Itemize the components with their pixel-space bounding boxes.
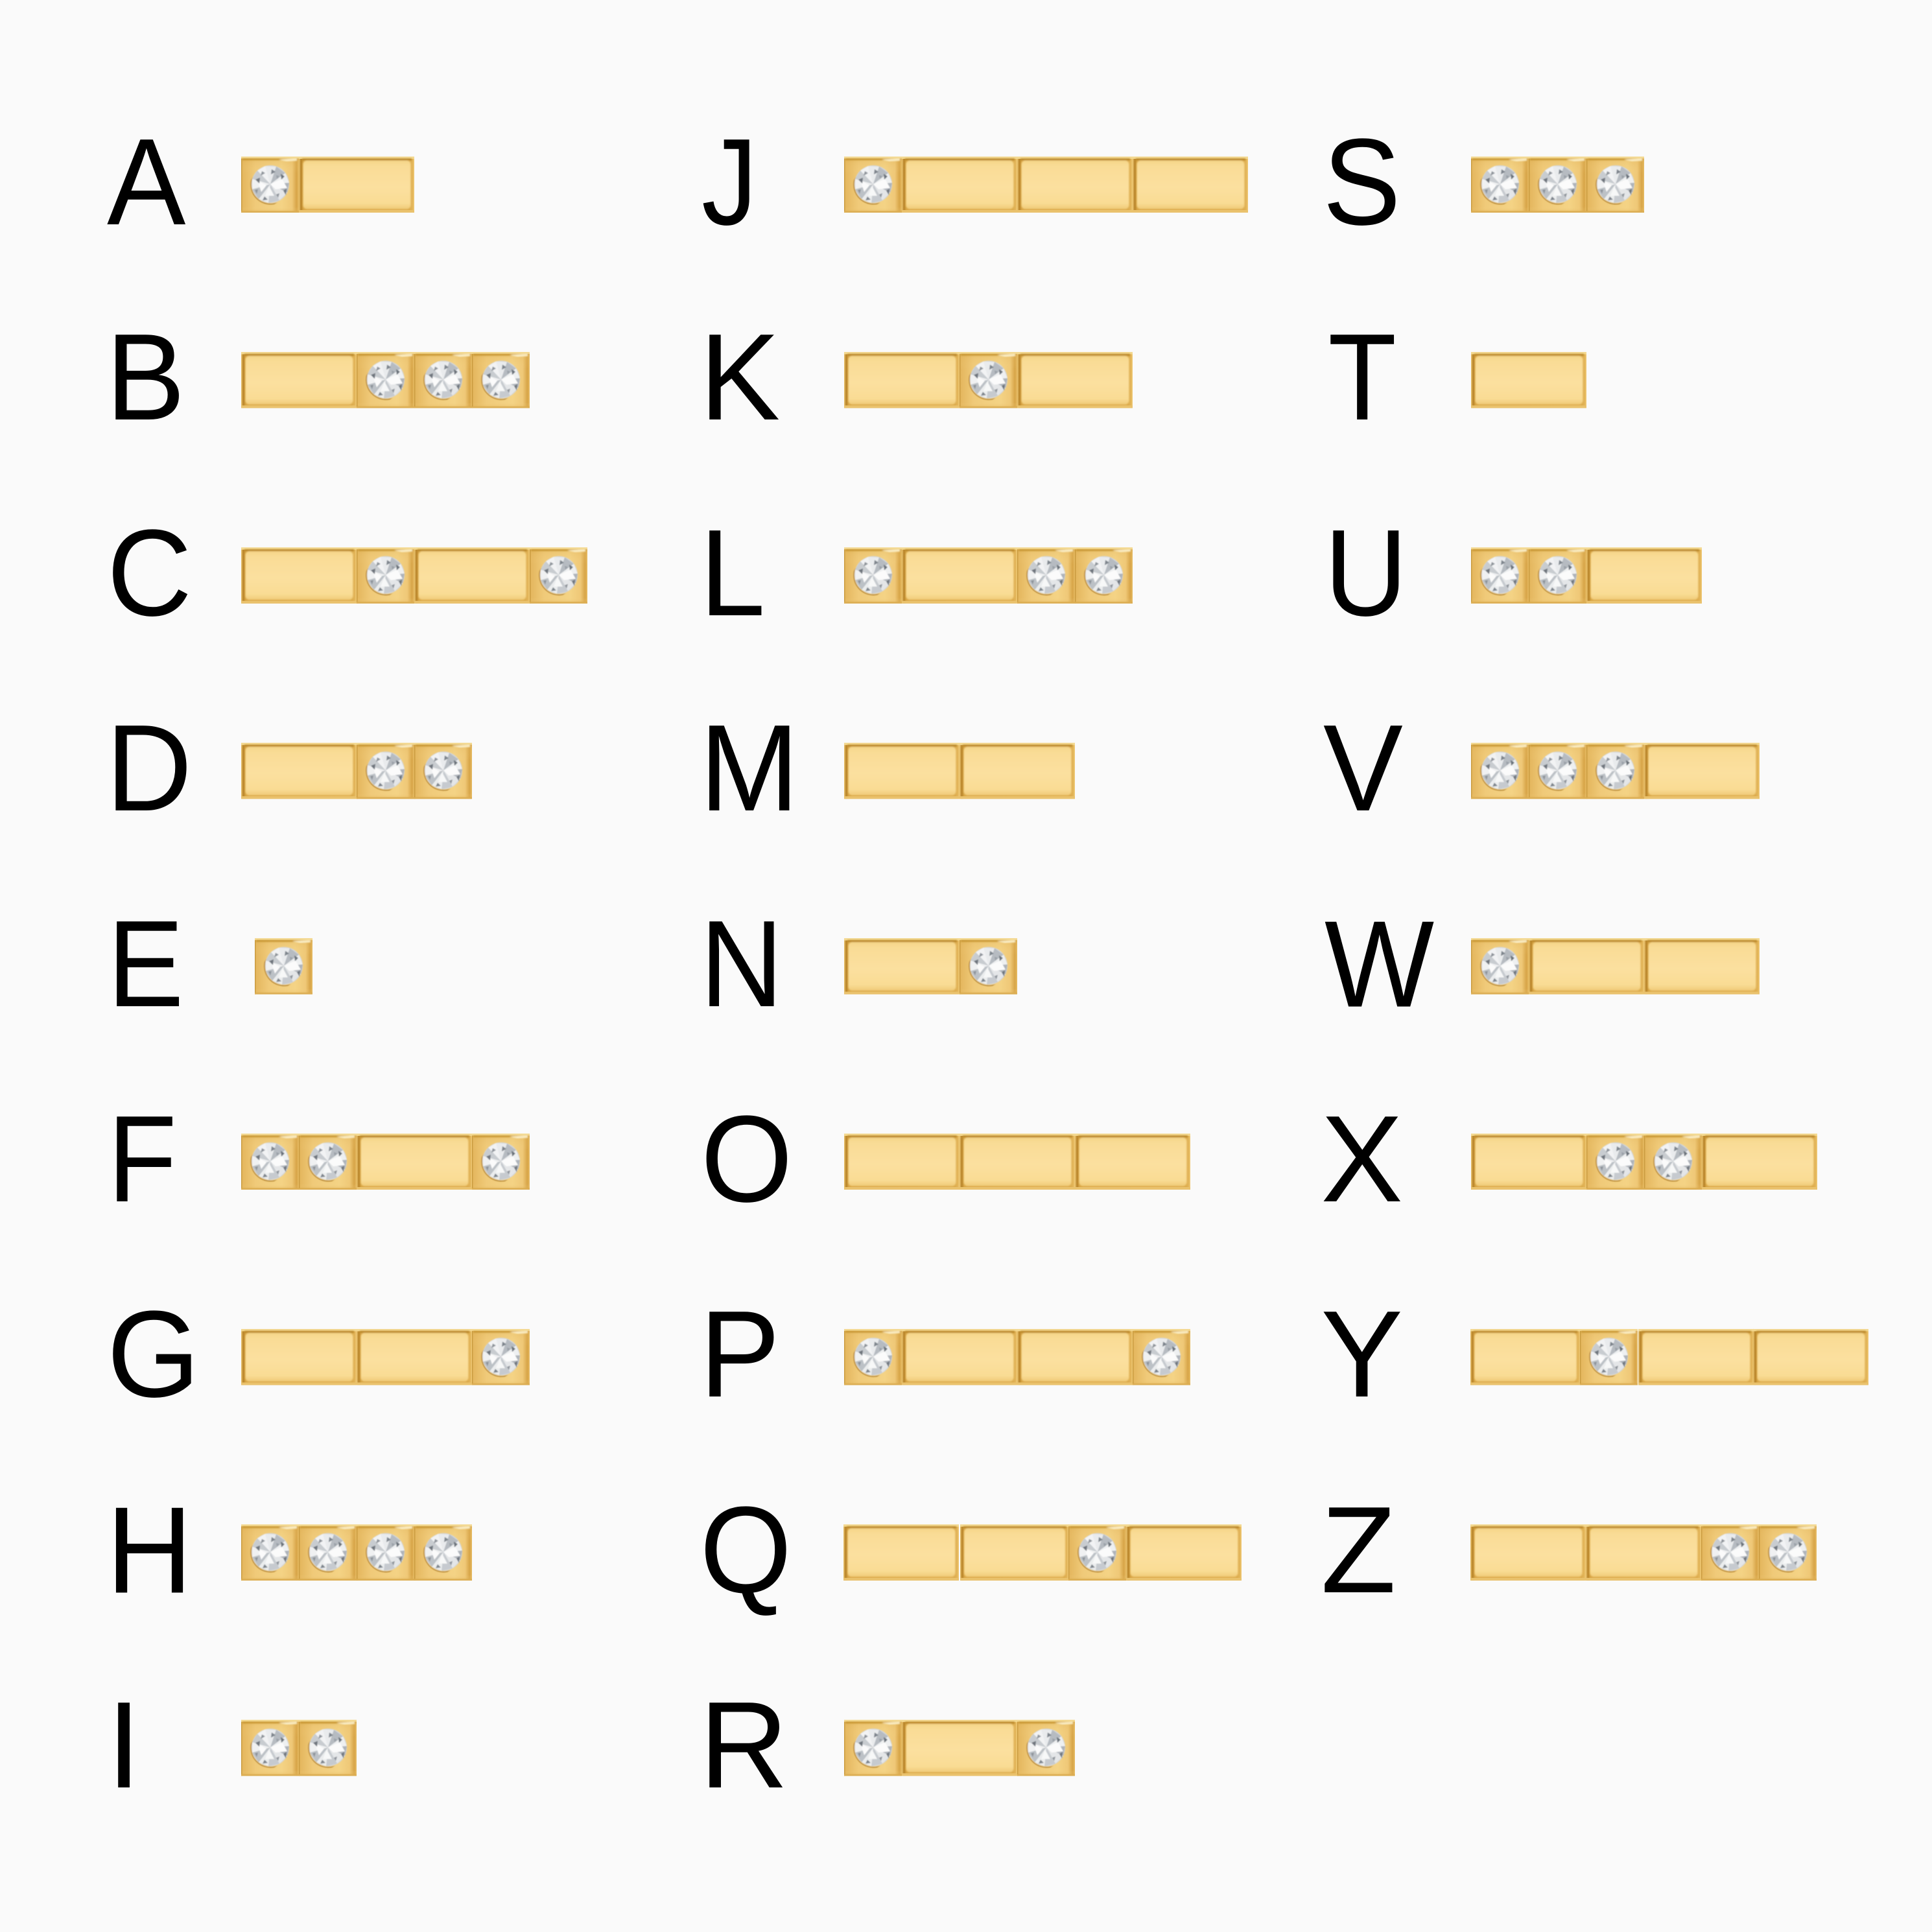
row: letter F xyxy=(108,1090,530,1228)
letter K: K xyxy=(700,308,780,445)
code for F xyxy=(241,1133,530,1190)
letter U: U xyxy=(1325,504,1408,641)
code for X xyxy=(1471,1133,1817,1190)
code for C xyxy=(241,547,587,604)
code for M xyxy=(844,743,1075,799)
code for S xyxy=(1471,157,1644,213)
code for K xyxy=(844,352,1133,408)
code for J xyxy=(844,157,1248,213)
row: letter T xyxy=(1328,309,1586,446)
row: letter J xyxy=(701,114,1248,251)
row: letter O xyxy=(701,1090,1190,1228)
letter L: L xyxy=(700,504,765,642)
row: letter A xyxy=(107,113,414,251)
letter Y: Y xyxy=(1321,1286,1403,1423)
code for I xyxy=(241,1720,357,1776)
code for P xyxy=(844,1329,1190,1385)
letter F: F xyxy=(108,1090,177,1228)
letter W: W xyxy=(1325,896,1434,1033)
letter D: D xyxy=(106,699,192,837)
row: letter C xyxy=(107,504,587,642)
letter P: P xyxy=(700,1285,780,1422)
row: letter N xyxy=(700,895,1017,1032)
code for B xyxy=(241,352,530,408)
code for L xyxy=(844,547,1133,604)
row: letter I xyxy=(107,1677,357,1814)
code for U xyxy=(1471,547,1702,604)
letter S: S xyxy=(1323,113,1401,251)
letter V: V xyxy=(1323,699,1403,837)
row: letter R xyxy=(700,1677,1075,1814)
row: letter D xyxy=(106,699,472,837)
row: letter L xyxy=(700,504,1133,642)
letter M: M xyxy=(700,699,799,837)
letter C: C xyxy=(107,504,192,642)
row: letter W xyxy=(1325,896,1760,1033)
row: letter V xyxy=(1323,699,1760,837)
row: letter K xyxy=(700,308,1133,445)
code for W xyxy=(1471,938,1760,995)
code for Q xyxy=(843,1524,1242,1581)
code for T xyxy=(1471,352,1586,408)
code for D xyxy=(241,743,472,799)
letter G: G xyxy=(107,1285,200,1423)
letter Q: Q xyxy=(700,1481,792,1619)
letter Z: Z xyxy=(1321,1481,1396,1619)
code for Y xyxy=(1470,1329,1868,1385)
letter T: T xyxy=(1328,309,1396,446)
row: letter Y xyxy=(1321,1286,1868,1423)
letter R: R xyxy=(700,1677,788,1814)
code for Z xyxy=(1470,1524,1817,1581)
row: letter Q xyxy=(700,1481,1242,1619)
code for A xyxy=(241,157,414,213)
row: letter G xyxy=(107,1285,530,1423)
letter I: I xyxy=(107,1677,141,1814)
row: letter S xyxy=(1323,113,1644,251)
code for H xyxy=(241,1524,472,1581)
row: letter H xyxy=(106,1481,472,1619)
row: letter U xyxy=(1325,504,1702,641)
code for O xyxy=(844,1133,1190,1190)
letter B: B xyxy=(106,308,185,446)
letter O: O xyxy=(701,1090,793,1228)
letter X: X xyxy=(1321,1090,1403,1228)
code for R xyxy=(844,1720,1075,1776)
row: letter P xyxy=(700,1285,1190,1422)
row: letter X xyxy=(1321,1090,1817,1228)
code for E xyxy=(255,938,312,995)
code for N xyxy=(844,938,1017,995)
letter H: H xyxy=(106,1481,193,1619)
code for G xyxy=(241,1329,530,1385)
row: letter M xyxy=(700,699,1075,837)
letter A: A xyxy=(107,113,185,251)
row: letter E xyxy=(108,895,312,1032)
row: letter B xyxy=(106,308,530,446)
letter N: N xyxy=(700,895,783,1032)
code for V xyxy=(1471,743,1760,799)
row: letter Z xyxy=(1321,1481,1817,1619)
letter E: E xyxy=(108,895,184,1032)
letter J: J xyxy=(701,114,757,251)
